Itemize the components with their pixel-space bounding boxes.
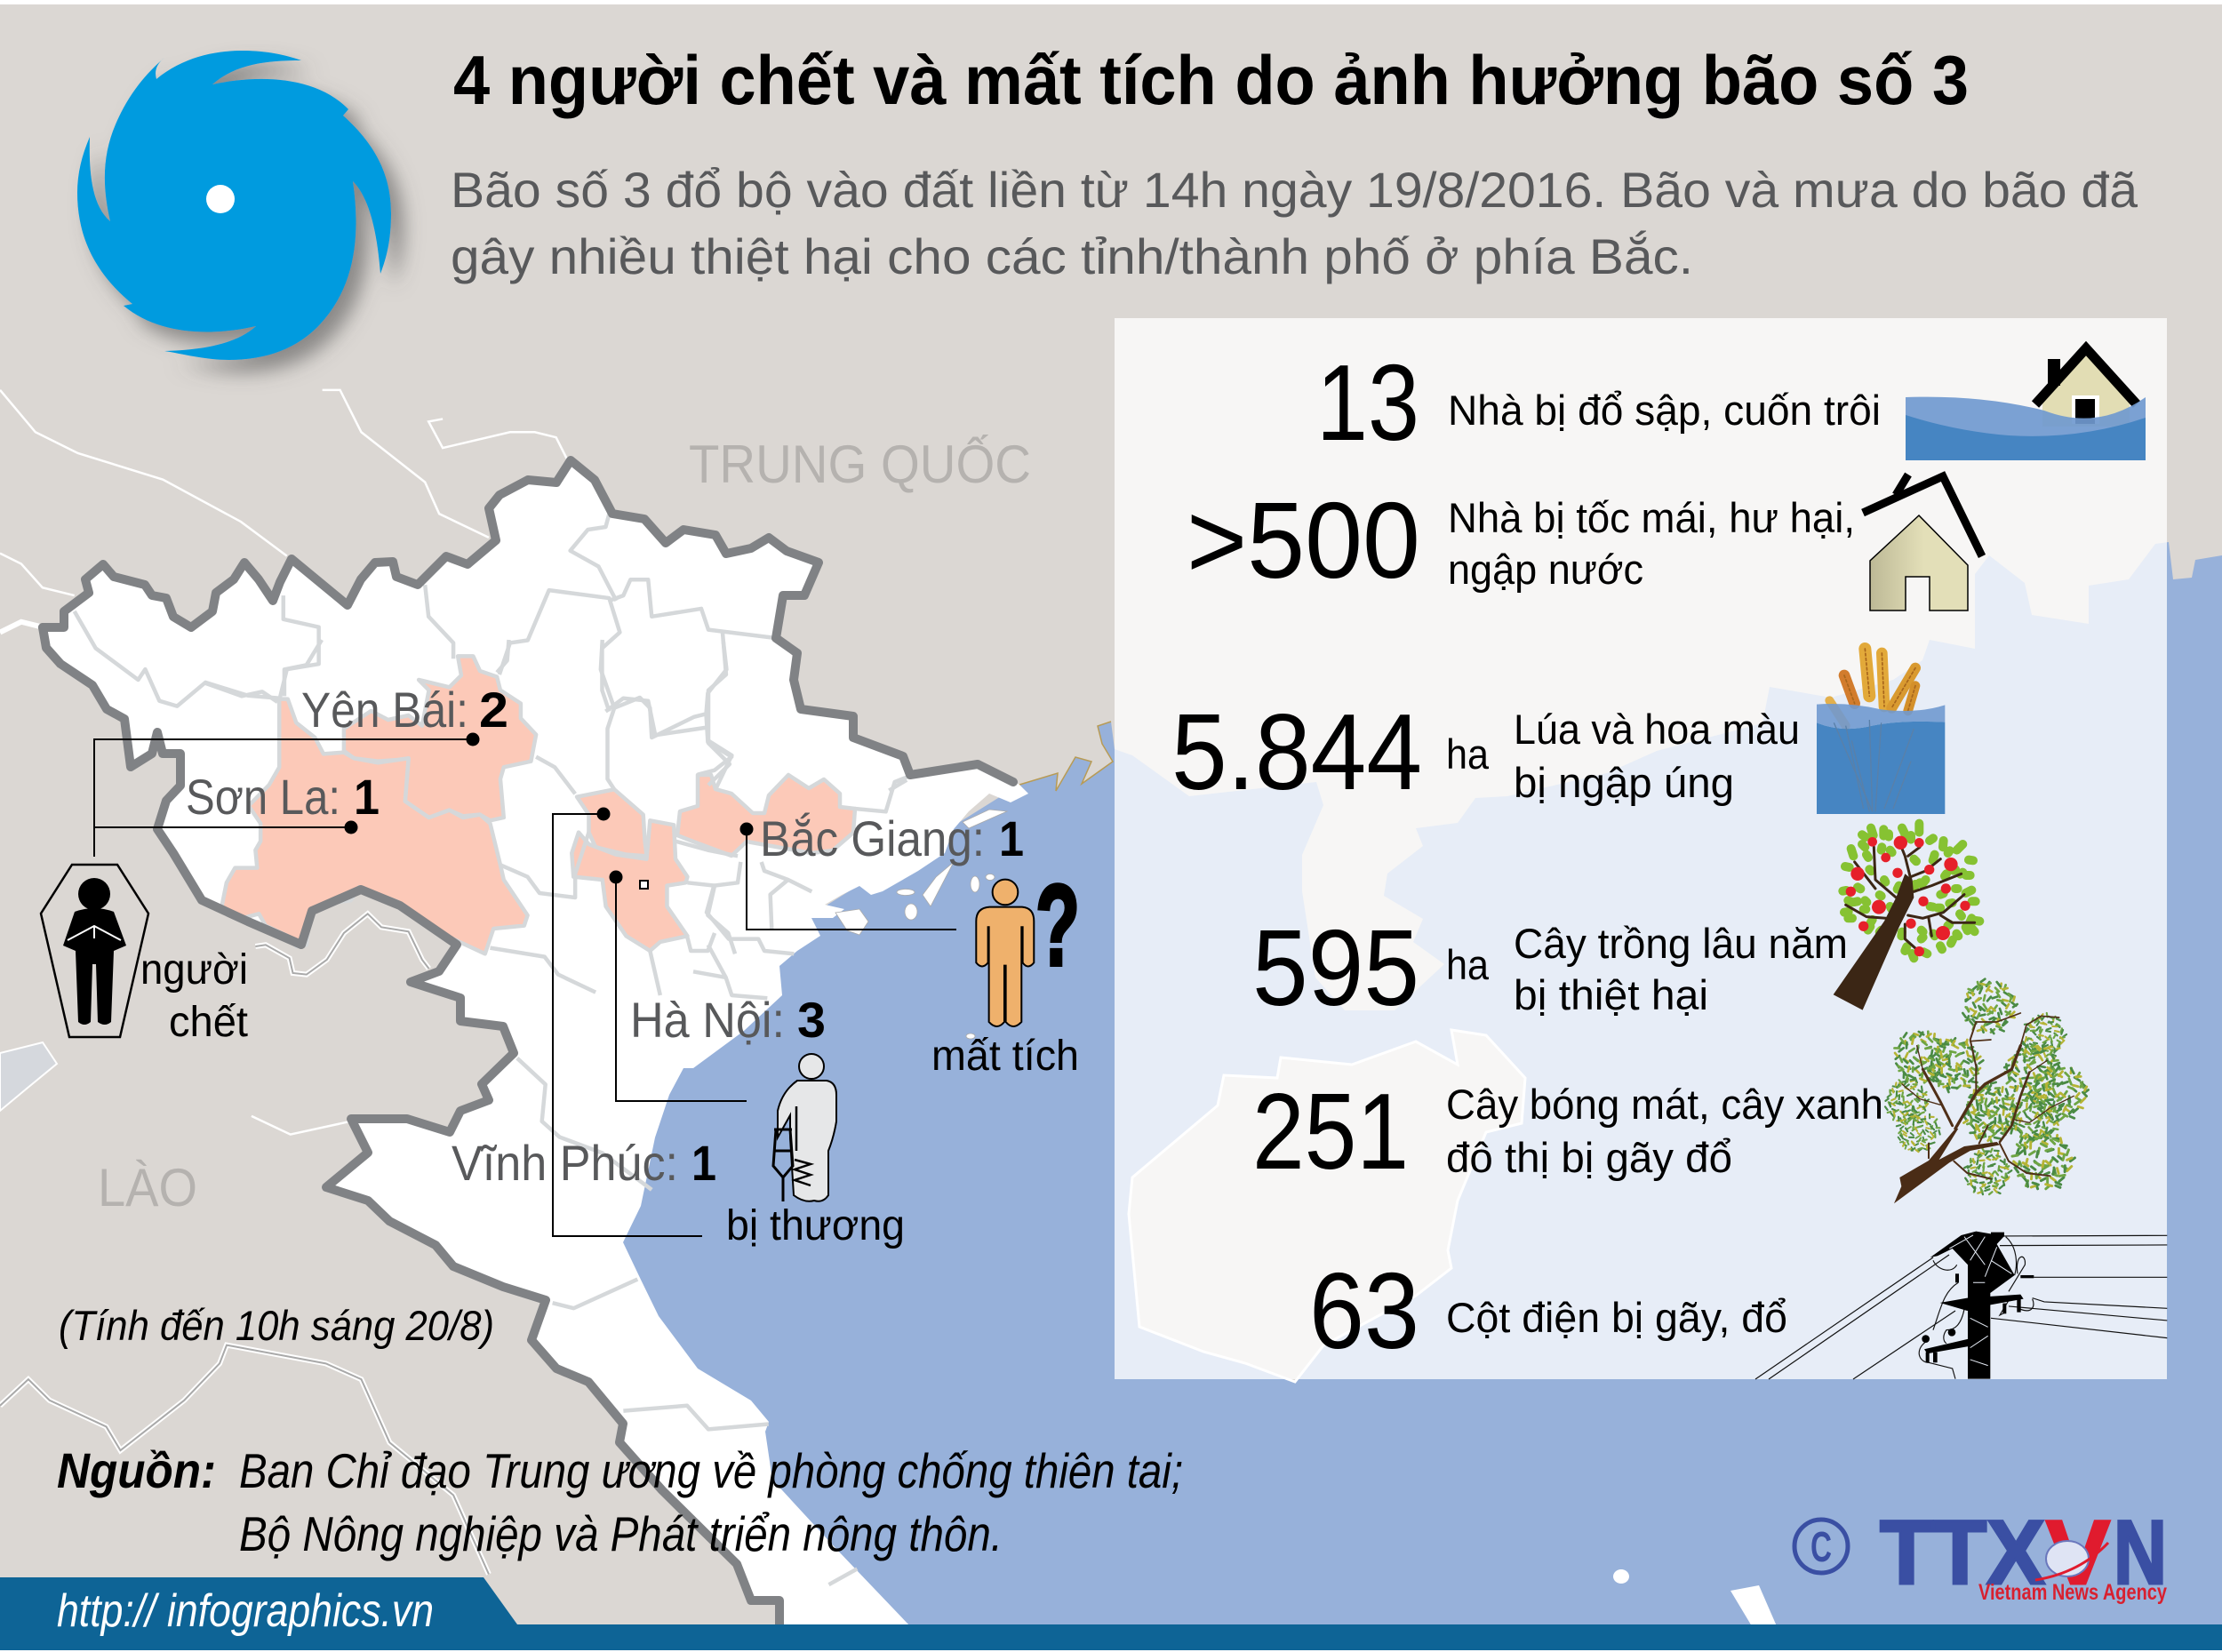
label: Yen Bai: Yên Bái: bbox=[301, 682, 468, 738]
stat: damaged houses bbox=[1187, 480, 1855, 601]
icon: house without roof bbox=[1863, 475, 1982, 611]
stat: perennial crops: 595 bbox=[1252, 907, 1419, 1028]
logo: TTXVN: N bbox=[2114, 1502, 2167, 1603]
source text: Bộ Nông nghiệp và Phát triển nông thôn. bbox=[239, 1506, 1003, 1561]
map: lake in Laos bbox=[0, 1042, 57, 1111]
logo: copyright symbol bbox=[1794, 1520, 1848, 1573]
icon: power pole bbox=[1755, 1232, 2167, 1379]
icon: injured person bbox=[773, 1054, 836, 1201]
province: Ha Noi bbox=[571, 820, 687, 951]
stat: rice flooded: ha bbox=[1446, 730, 1490, 778]
subtitle bbox=[451, 162, 2138, 284]
label: deaths caption bbox=[140, 946, 248, 1046]
label: missing caption: mất tích bbox=[931, 1033, 1079, 1080]
logo: TTXVN: TTX bbox=[1880, 1502, 2045, 1603]
icon: flooded house bbox=[1906, 348, 2146, 460]
stat: shade trees bbox=[1252, 1071, 1883, 1192]
label: Trung Quoc: TRUNG QUỐC bbox=[689, 435, 1031, 494]
label: deaths caption: người bbox=[140, 946, 248, 994]
source text bbox=[239, 1443, 1183, 1561]
icon: person in coffin bbox=[41, 865, 148, 1037]
leader line: Son La bbox=[94, 826, 351, 828]
stat: collapsed houses: 13 bbox=[1316, 342, 1419, 463]
source text: Ban Chỉ đạo Trung ương về phòng chống thiên tai; bbox=[239, 1443, 1183, 1498]
subtitle: gây nhiều thiệt hại cho các tỉnh/thành phố ở phía Bắc. bbox=[451, 228, 1693, 284]
footer url: http:// infographics.vn bbox=[57, 1585, 434, 1637]
label: Vinh Phuc: 1 bbox=[691, 1135, 716, 1191]
map: China coast outline bbox=[1019, 722, 1113, 791]
stat: perennial crops: bị thiệt hại bbox=[1514, 971, 1708, 1018]
stat: rice flooded: bị ngập úng bbox=[1514, 759, 1734, 806]
subtitle: Bão số 3 đổ bộ vào đất liền từ 14h ngày 19/8/2016. Bão và mưa do bão đã bbox=[451, 162, 2138, 218]
stat: perennial crops bbox=[1252, 907, 1848, 1028]
icon: question mark: ? bbox=[1035, 860, 1080, 990]
map: province boundaries bbox=[75, 514, 909, 1584]
label: Bac Giang: 1 bbox=[999, 810, 1024, 866]
label: injured caption: bị thương bbox=[726, 1202, 905, 1249]
label: Ha Noi: 3 bbox=[797, 992, 826, 1048]
note: data cutoff: (Tính đến 10h sáng 20/8) bbox=[59, 1302, 494, 1349]
province: Bac Giang bbox=[677, 775, 855, 856]
stat: damaged houses: ngập nước bbox=[1448, 546, 1643, 593]
stat: shade trees: đô thị bị gãy đổ bbox=[1446, 1134, 1732, 1181]
stat: rice flooded: 5.844 bbox=[1171, 691, 1422, 812]
leader line: Vinh Phuc bbox=[553, 814, 702, 1236]
stat: rice flooded bbox=[1171, 691, 1800, 812]
stat: power poles: 63 bbox=[1309, 1250, 1419, 1371]
map: Vietnam international border bbox=[43, 460, 1013, 1626]
label: Vinh Phuc: Vĩnh Phúc: bbox=[452, 1135, 678, 1191]
dots: province markers bbox=[345, 732, 754, 883]
footer band bbox=[0, 1577, 2222, 1650]
province: Vinh Phuc bbox=[577, 789, 647, 856]
icon: missing person bbox=[976, 880, 1034, 1026]
label: Son La: 1 bbox=[354, 769, 380, 825]
map: affected provinces bbox=[221, 656, 855, 954]
stat: shade trees: Cây bóng mát, cây xanh bbox=[1446, 1081, 1883, 1128]
leader lines: deaths to Yen Bai bbox=[94, 739, 473, 857]
label: Son La: Sơn La: bbox=[186, 769, 340, 825]
stat: perennial crops: Cây trồng lâu năm bbox=[1514, 920, 1848, 967]
label: Ha Noi: Hà Nội: bbox=[630, 992, 785, 1048]
stat: rice flooded: Lúa và hoa màu bbox=[1514, 706, 1800, 753]
stat: shade trees: 251 bbox=[1252, 1071, 1409, 1192]
panel: damage statistics background bbox=[1115, 318, 2167, 1379]
map: foreign rivers and boundaries bbox=[0, 390, 567, 1574]
stat: damaged houses: >500 bbox=[1187, 480, 1420, 601]
logo: agency name: Vietnam News Agency bbox=[1978, 1580, 2167, 1605]
stat: power poles: Cột điện bị gãy, đổ bbox=[1446, 1294, 1787, 1341]
label: Yen Bai: 2 bbox=[479, 682, 508, 738]
map: Vietnam land bbox=[43, 460, 1028, 1626]
logo: copyright symbol: C bbox=[1810, 1524, 1832, 1571]
bottom white islands bbox=[1613, 1569, 1777, 1626]
leader line: Ha Noi bbox=[616, 877, 747, 1101]
stat: collapsed houses: Nhà bị đổ sập, cuốn trôi bbox=[1448, 387, 1881, 434]
province: Son La bbox=[221, 699, 528, 954]
icon: apple tree bbox=[1834, 824, 1979, 1010]
label: Bac Giang: Bắc Giang: bbox=[760, 810, 985, 866]
icon: Hanoi capital marker bbox=[640, 881, 648, 889]
map: Hainan island bbox=[1129, 1030, 1525, 1382]
source heading: Nguồn: bbox=[57, 1442, 216, 1498]
stat: power poles bbox=[1309, 1250, 1787, 1371]
logo: TTXVN bbox=[1880, 1502, 2167, 1603]
icon: fallen tree bbox=[1880, 979, 2091, 1203]
stat: damaged houses: Nhà bị tốc mái, hư hại, bbox=[1448, 494, 1855, 541]
icon: flooded rice bbox=[1817, 649, 1945, 814]
province: Yen Bai bbox=[344, 656, 536, 820]
label: Lao: LÀO bbox=[98, 1158, 197, 1217]
leader line: Bac Giang bbox=[747, 829, 956, 930]
map: sea bbox=[613, 542, 2222, 1626]
title: 4 người chết và mất tích do ảnh hưởng bão số 3 bbox=[453, 41, 1969, 119]
stat: collapsed houses bbox=[1316, 342, 1881, 463]
label: deaths caption: chết bbox=[169, 999, 248, 1046]
icon: cyclone bbox=[77, 51, 391, 360]
map: small islands in Ha Long bay bbox=[835, 810, 1007, 1039]
stat: perennial crops: ha bbox=[1446, 941, 1490, 988]
logo: TTXVN: V bbox=[2046, 1502, 2110, 1603]
